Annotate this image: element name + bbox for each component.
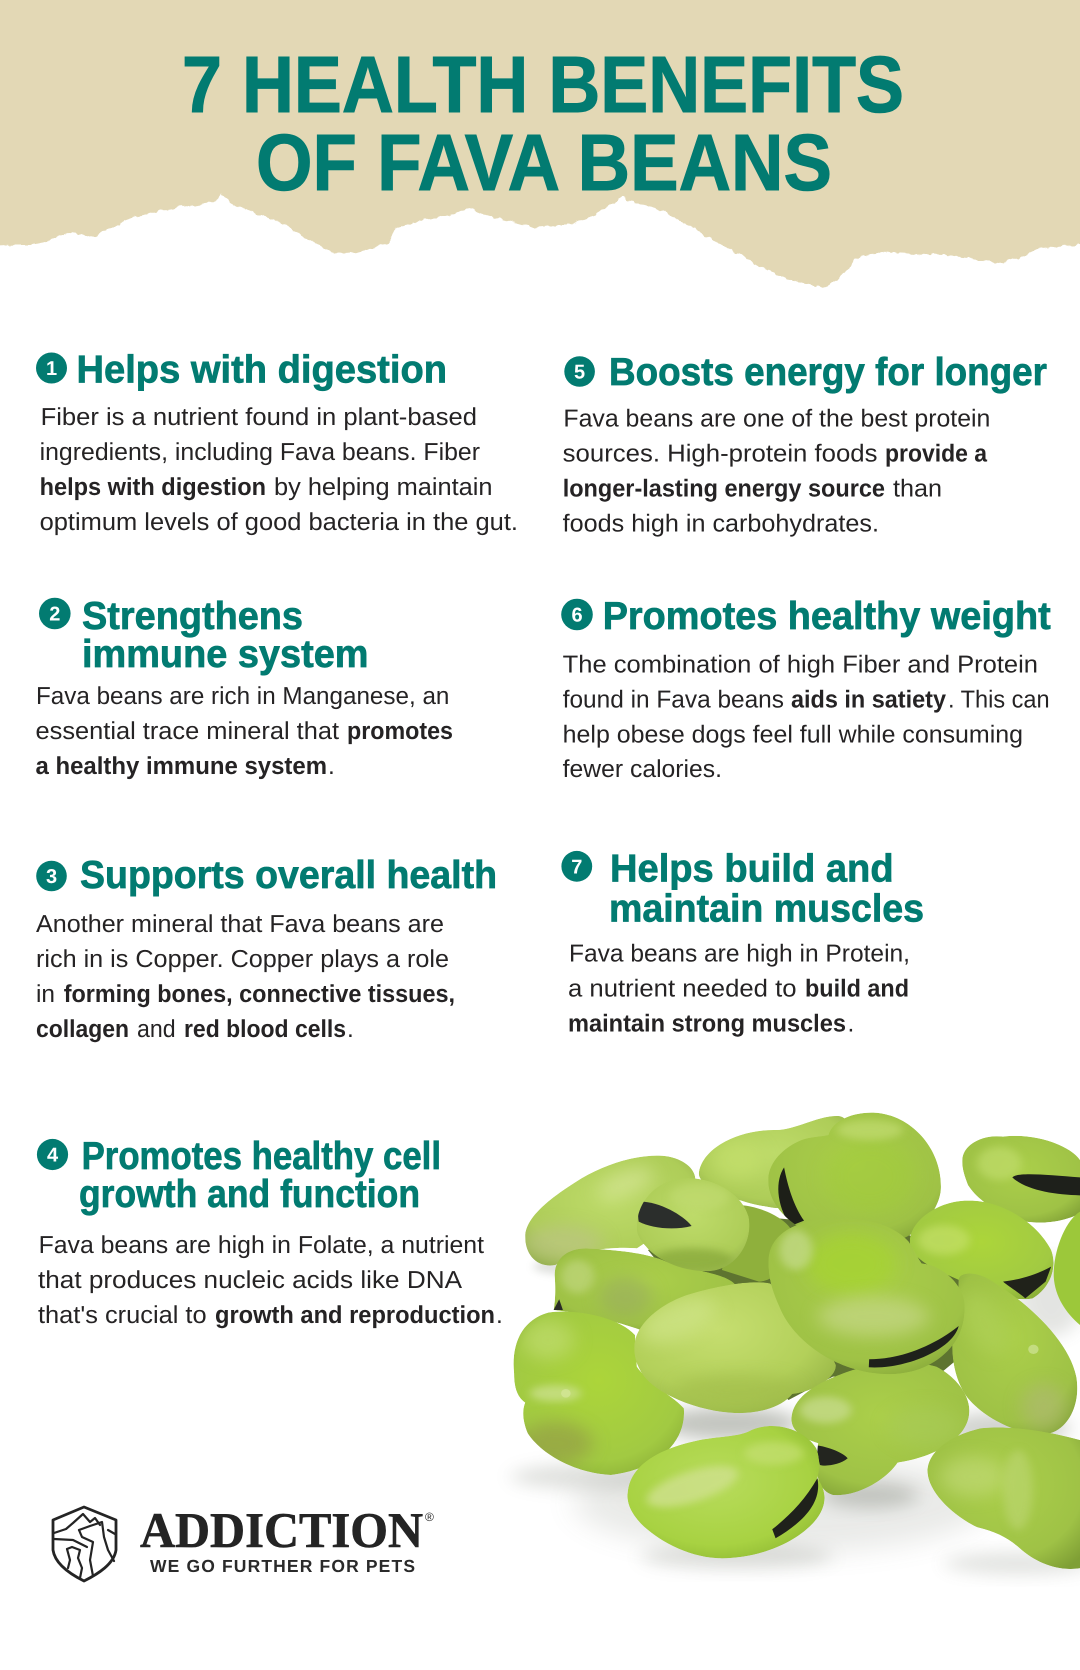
body 7: Fava beans are high in Protein, <box>569 941 910 968</box>
icon: number 4: 4 <box>47 1144 59 1166</box>
body 3: rich in is Copper. Copper plays a role <box>36 946 449 973</box>
body 1 <box>40 404 518 536</box>
body 7: . <box>848 1011 854 1038</box>
icon: number 6 <box>561 599 593 630</box>
illustration: pile of fava beans <box>511 1113 1080 1575</box>
body 2: promotes <box>347 718 453 745</box>
icon: number 5: 5 <box>574 362 585 384</box>
bean: back top <box>699 1116 850 1208</box>
bean: right middle <box>910 1201 1054 1299</box>
body 3: and <box>137 1016 176 1043</box>
body 6 <box>563 652 1050 783</box>
panel: benefit 6 weight <box>561 595 1051 783</box>
body 2 <box>36 683 453 780</box>
title <box>182 40 904 207</box>
heading 7 <box>609 848 924 931</box>
body 7 <box>568 941 910 1038</box>
body 5: sources. High-protein foods <box>563 441 878 468</box>
bean: small with dark hilum <box>637 1178 749 1272</box>
body 1: Fiber is a nutrient found in plant-based <box>41 404 477 431</box>
icon: number 4 <box>37 1139 68 1170</box>
heading 5: Boosts energy for longer <box>609 351 1047 394</box>
body 6: aids in satiety <box>791 687 946 714</box>
bean: right top with hilum <box>962 1136 1080 1223</box>
wordmark: ADDICTION <box>140 1502 423 1558</box>
panel: benefit 1 digestion <box>36 349 518 536</box>
bean: far right edge <box>1054 1212 1080 1325</box>
registered mark: ® <box>425 1510 434 1524</box>
body 6: . This can <box>948 687 1050 714</box>
underlay: dark gaps between beans <box>648 1217 961 1400</box>
panel: benefit 7 muscles <box>561 848 924 1038</box>
bean: right oblong <box>952 1274 1077 1434</box>
body 4 <box>38 1232 503 1329</box>
body 5: than <box>893 476 942 503</box>
body 5: longer-lasting energy source <box>563 476 885 503</box>
body 6: help obese dogs feel full while consuming <box>563 722 1023 749</box>
panel: benefit 5 energy <box>563 351 1047 538</box>
body 7: maintain strong muscles <box>568 1011 846 1038</box>
body 2: Fava beans are rich in Manganese, an <box>36 683 449 710</box>
heading 2 <box>82 595 368 676</box>
heading 1: Helps with digestion <box>76 349 447 392</box>
bean: bottom right <box>928 1428 1080 1569</box>
body 4: that's crucial to <box>38 1302 207 1329</box>
icon: number 5 <box>564 356 595 387</box>
body 3: Another mineral that Fava beans are <box>36 911 444 938</box>
bean: top large with hilum <box>768 1113 941 1242</box>
body 5: foods high in carbohydrates. <box>563 511 879 538</box>
panel: benefit 3 overall health <box>36 854 497 1043</box>
icon: number 2 <box>39 598 71 629</box>
body 3: forming bones, connective tissues, <box>64 981 455 1008</box>
body 3: in <box>36 981 55 1008</box>
body 5 <box>563 406 990 538</box>
body 3: collagen <box>36 1016 129 1043</box>
body 5: Fava beans are one of the best protein <box>563 406 990 433</box>
bean: back left <box>522 1156 695 1265</box>
hilum sliver <box>554 1299 563 1310</box>
bean: main heart with hilum <box>768 1218 965 1374</box>
heading 4: Promotes healthy cell <box>82 1135 441 1178</box>
header: torn paper banner <box>0 0 1080 288</box>
bean: left middle <box>554 1249 737 1330</box>
icon: number 7: 7 <box>571 856 582 878</box>
panel: benefit 2 immune system <box>36 595 453 780</box>
tagline: WE GO FURTHER FOR PETS <box>150 1556 415 1576</box>
heading 4 <box>79 1135 441 1216</box>
body 5: provide a <box>885 441 987 468</box>
icon: number 2: 2 <box>49 604 60 626</box>
body 6: The combination of high Fiber and Protein <box>563 652 1038 679</box>
icon: number 1 <box>36 352 67 384</box>
body 1: ingredients, including Fava beans. Fiber <box>40 439 480 466</box>
body 4: growth and reproduction <box>215 1302 495 1329</box>
panel: benefit 4 cell growth <box>37 1135 503 1329</box>
heading 2: Strengthens <box>82 595 303 638</box>
icon: number 3: 3 <box>46 866 57 888</box>
body 2: a healthy immune system <box>36 753 327 780</box>
icon: number 6: 6 <box>571 604 583 626</box>
icon: shield with dog and cat <box>53 1507 116 1581</box>
bean: small rear lobe <box>722 1205 792 1282</box>
body 2: . <box>328 753 335 780</box>
heading 6: Promotes healthy weight <box>603 595 1051 638</box>
bean: centre flat <box>632 1282 836 1413</box>
icon: number 1: 1 <box>46 358 57 380</box>
body 7: a nutrient needed to <box>568 976 796 1003</box>
title: 7 HEALTH BENEFITS <box>182 40 904 129</box>
body 3: red blood cells <box>184 1016 346 1043</box>
bean: bottom middle with hilum <box>791 1363 969 1495</box>
bean: lower left large <box>514 1312 684 1475</box>
logo: Addiction <box>53 1502 434 1581</box>
icon: number 3 <box>36 861 67 891</box>
heading 3: Supports overall health <box>80 854 497 897</box>
body 3 <box>36 911 455 1043</box>
body 1: helps with digestion <box>40 474 266 501</box>
body 6: found in Fava beans <box>563 687 784 714</box>
bean shadows <box>511 1257 1080 1575</box>
body 7: build and <box>805 976 909 1003</box>
body 4: that produces nucleic acids like DNA <box>38 1267 463 1294</box>
body 4: . <box>496 1302 503 1329</box>
body 6: fewer calories. <box>563 756 722 783</box>
body 1: optimum levels of good bacteria in the gut. <box>40 509 518 536</box>
body 2: essential trace mineral that <box>36 718 339 745</box>
body 4: Fava beans are high in Folate, a nutrient <box>39 1232 484 1259</box>
body 1: by helping maintain <box>274 474 492 501</box>
bean: bottom front with hilum <box>627 1426 825 1558</box>
heading 7: maintain muscles <box>609 888 924 931</box>
title: OF FAVA BEANS <box>256 118 832 207</box>
body 3: . <box>347 1016 354 1043</box>
heading 2: immune system <box>82 633 368 676</box>
heading 7: Helps build and <box>610 848 894 891</box>
icon: number 7 <box>561 851 592 882</box>
heading 4: growth and function <box>79 1173 420 1216</box>
